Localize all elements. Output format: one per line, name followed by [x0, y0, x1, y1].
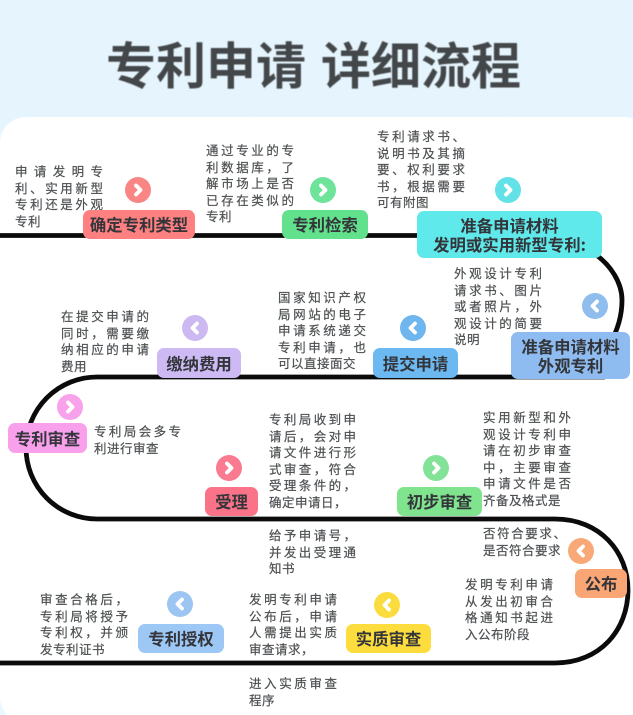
text: preliminary examination description: 齐备及格式是 [483, 494, 561, 508]
step: prepare materials for design patent [511, 332, 630, 379]
step: submit application: 提交申请 [383, 350, 448, 374]
text: preliminary examination description: 请在初步审查 [483, 444, 571, 458]
text: patent grant description [40, 593, 128, 657]
text: submit application description: 局网站的电子 [278, 308, 366, 322]
text: substantive examination description: 公布后，申请 [249, 610, 337, 624]
text: design materials description: 或者照片，外 [454, 300, 542, 314]
text: substantive examination description: 发明专利申请 [249, 593, 337, 607]
step: patent search [282, 210, 368, 239]
text: publication description [465, 578, 553, 642]
step: publication: 公布 [585, 571, 617, 595]
text: substantive examination description continued: 程序 [249, 694, 275, 708]
text: submit application description: 申请系统递交 [278, 324, 366, 338]
text: design materials description [454, 267, 542, 347]
text: substantive examination description [249, 593, 337, 657]
text: substantive examination description continued [249, 677, 337, 708]
text: acceptance description continued: 知书 [269, 562, 295, 576]
step: determine patent type: 确定专利类型 [90, 212, 188, 236]
text: acceptance description continued: 给予申请号， [269, 529, 356, 543]
text: patent search description [206, 144, 294, 224]
icon: cyan chevron [495, 177, 521, 203]
icon: yellow chevron [374, 592, 400, 618]
text: pay fees description [61, 310, 149, 374]
text: patent search description: 解市场上是否 [206, 177, 294, 191]
text: acceptance description: 请后，会对申 [269, 430, 356, 444]
title: 详细流程 [321, 27, 521, 99]
text: acceptance description continued: 并发出受理通 [269, 546, 356, 560]
text: patent search description: 通过专业的专 [206, 144, 294, 158]
text: acceptance description continued [269, 529, 356, 576]
step: prepare materials for design patent: 准备申请材料 [521, 334, 620, 358]
step: substantive examination: 实质审查 [356, 626, 421, 650]
text: choose type description [15, 165, 103, 229]
text: choose type description: 申请发明专 [15, 165, 103, 179]
step: patent grant: 专利授权 [148, 626, 214, 650]
text: submit application description [278, 291, 366, 371]
text: publication description: 格通知书起进 [465, 611, 553, 625]
text: patent grant description: 审查合格后， [40, 593, 128, 607]
text: acceptance description [269, 413, 356, 510]
step: substantive examination [346, 624, 431, 653]
text: patent grant description: 发专利证书 [40, 643, 105, 657]
text: choose type description: 专利还是外观 [15, 198, 103, 212]
text: submit application description: 可以直接面交 [278, 357, 356, 371]
icon: purple chevron [182, 315, 208, 341]
step: prepare materials for invention or utility model: 准备申请材料 [460, 212, 559, 236]
icon: light green chevron [423, 455, 449, 481]
text: acceptance description: 确定申请日， [269, 496, 347, 510]
text: preliminary examination description: 中，主要审查 [483, 461, 571, 475]
text: publication description: 发明专利申请 [465, 578, 553, 592]
text: design materials description: 说明 [454, 333, 480, 347]
text: pay fees description: 在提交申请的 [61, 310, 149, 324]
step: publication [575, 569, 627, 598]
icon: pink chevron [57, 394, 83, 420]
text: patent search description: 利数据库，了 [206, 161, 294, 175]
icon: light blue chevron [167, 591, 193, 617]
text: invention materials description [377, 130, 465, 210]
text: substantive examination description continued: 进入实质审查 [249, 677, 337, 691]
text: patent grant description: 专利局将授予 [40, 610, 128, 624]
text: substantive examination description: 人需提出实质 [249, 626, 337, 640]
icon: orange chevron [568, 538, 594, 564]
text: invention materials description: 要、权利要求 [377, 163, 465, 177]
step: acceptance [205, 487, 258, 516]
step: patent examination [8, 423, 87, 453]
title: 专利申请 [106, 27, 306, 99]
text: patent search description: 专利 [206, 210, 232, 224]
text: patent examination description: 利进行审查 [94, 442, 159, 456]
step: preliminary examination [397, 487, 482, 516]
icon: rose chevron [216, 455, 242, 481]
text: publication description: 入公布阶段 [465, 628, 530, 642]
text: pay fees description: 费用 [61, 360, 87, 374]
step: pay fees: 缴纳费用 [166, 350, 232, 374]
text: preliminary examination description continued: 是否符合要求 [483, 544, 561, 558]
text: preliminary examination description: 观设计专利申 [483, 428, 571, 442]
step: prepare materials for invention or utility model [417, 211, 602, 258]
step: submit application [373, 348, 458, 378]
text: preliminary examination description continued: 否符合要求、 [483, 527, 566, 541]
step: prepare materials for invention or utility model: 发明或实用新型专利: [433, 232, 586, 256]
step: patent examination: 专利审查 [15, 426, 80, 450]
icon: green chevron [310, 177, 336, 203]
text: acceptance description: 受理条件的， [269, 479, 356, 493]
text: preliminary examination description [483, 411, 571, 508]
text: acceptance description: 式审查，符合 [269, 463, 356, 477]
icon: red chevron [125, 177, 151, 203]
text: preliminary examination description: 申请文件是否 [483, 477, 571, 491]
text: pay fees description: 纳相应的申请 [61, 343, 149, 357]
text: preliminary examination description: 实用新型和外 [483, 411, 571, 425]
text: invention materials description: 说明书及其摘 [377, 147, 465, 161]
text: patent examination description [94, 425, 181, 456]
step: pay fees [157, 348, 241, 378]
text: acceptance description: 请文件进行形 [269, 446, 356, 460]
text: invention materials description: 可有附图 [377, 196, 429, 210]
text: acceptance description: 专利局收到申 [269, 413, 356, 427]
text: pay fees description: 同时，需要缴 [61, 327, 149, 341]
text: patent examination description: 专利局会多专 [94, 425, 181, 439]
step: acceptance: 受理 [215, 489, 248, 513]
step: patent search: 专利检索 [292, 212, 358, 236]
text: submit application description: 国家知识产权 [278, 291, 366, 305]
text: invention materials description: 书，根据需要 [377, 180, 465, 194]
text: choose type description: 利、实用新型 [15, 182, 103, 196]
text: patent search description: 已存在类似的 [206, 194, 294, 208]
text: design materials description: 外观设计专利 [454, 267, 542, 281]
text: invention materials description: 专利请求书、 [377, 130, 465, 144]
title [106, 27, 521, 99]
text: patent grant description: 专利权，并颁 [40, 626, 128, 640]
text: submit application description: 专利申请，也 [278, 341, 366, 355]
step: preliminary examination: 初步审查 [407, 489, 472, 513]
text: design materials description: 请求书、图片 [454, 284, 542, 298]
step: prepare materials for design patent: 外观专利 [538, 352, 603, 376]
icon: blue chevron right side [582, 293, 608, 319]
text: preliminary examination description continued [483, 527, 566, 558]
text: choose type description: 专利 [15, 215, 41, 229]
text: publication description: 从发出初审合 [465, 595, 553, 609]
step: patent grant [138, 624, 224, 653]
icon: sky blue chevron [400, 315, 426, 341]
text: substantive examination description: 审查请求， [249, 643, 314, 657]
text: design materials description: 观设计的简要 [454, 317, 542, 331]
